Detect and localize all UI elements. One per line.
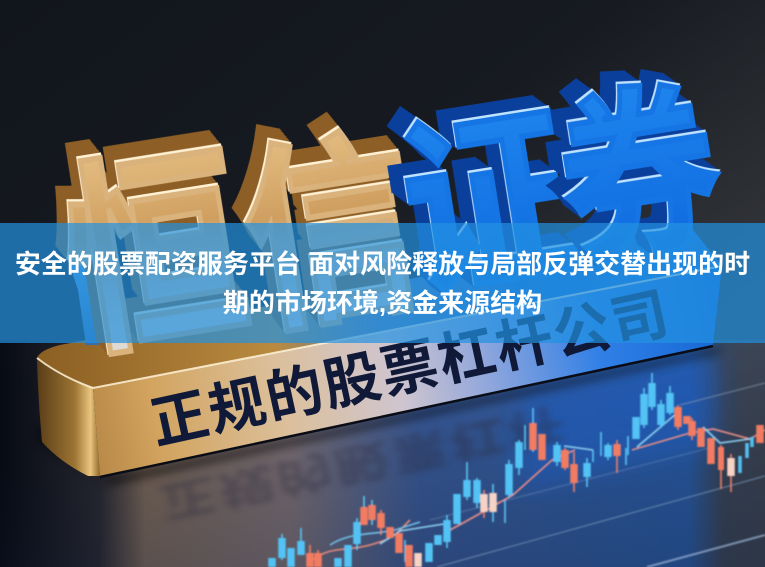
block top face	[37, 226, 722, 388]
headline text	[15, 249, 750, 318]
logo character: heng: 恒	[51, 127, 261, 384]
logo character: xin: 信	[230, 112, 433, 360]
block left end	[37, 358, 100, 476]
gold and blue base block	[37, 226, 722, 477]
headline text: 期的市场环境,资金来源结构	[223, 288, 542, 318]
blurred reflection of the base text: 正规的股票杠杆	[156, 398, 570, 526]
moving average lines	[310, 413, 765, 562]
reflective floor	[0, 340, 765, 567]
logo character: zheng: 证	[390, 87, 586, 324]
blue-lit left sides of the first character	[58, 166, 100, 345]
headline text: 安全的股票配资服务平台 面对风险释放与局部反弹交替出现的时	[15, 249, 750, 279]
block front text: 正规的股票杠杆公司	[145, 281, 676, 457]
block highlight edge	[37, 266, 722, 388]
blue candles	[272, 383, 670, 567]
3D logo characters	[51, 65, 734, 384]
red candles	[310, 407, 760, 567]
blue block glow on floor	[520, 350, 718, 490]
block base edge	[100, 346, 713, 477]
translucent headline band	[0, 223, 765, 343]
chart grid lines	[430, 383, 765, 567]
wicks	[282, 373, 670, 562]
block front face	[93, 266, 722, 476]
logo character: quan: 券	[546, 65, 734, 292]
pale candles	[418, 458, 731, 567]
background wall	[0, 0, 765, 400]
candlestick chart	[272, 373, 765, 567]
block shadow	[40, 348, 720, 484]
